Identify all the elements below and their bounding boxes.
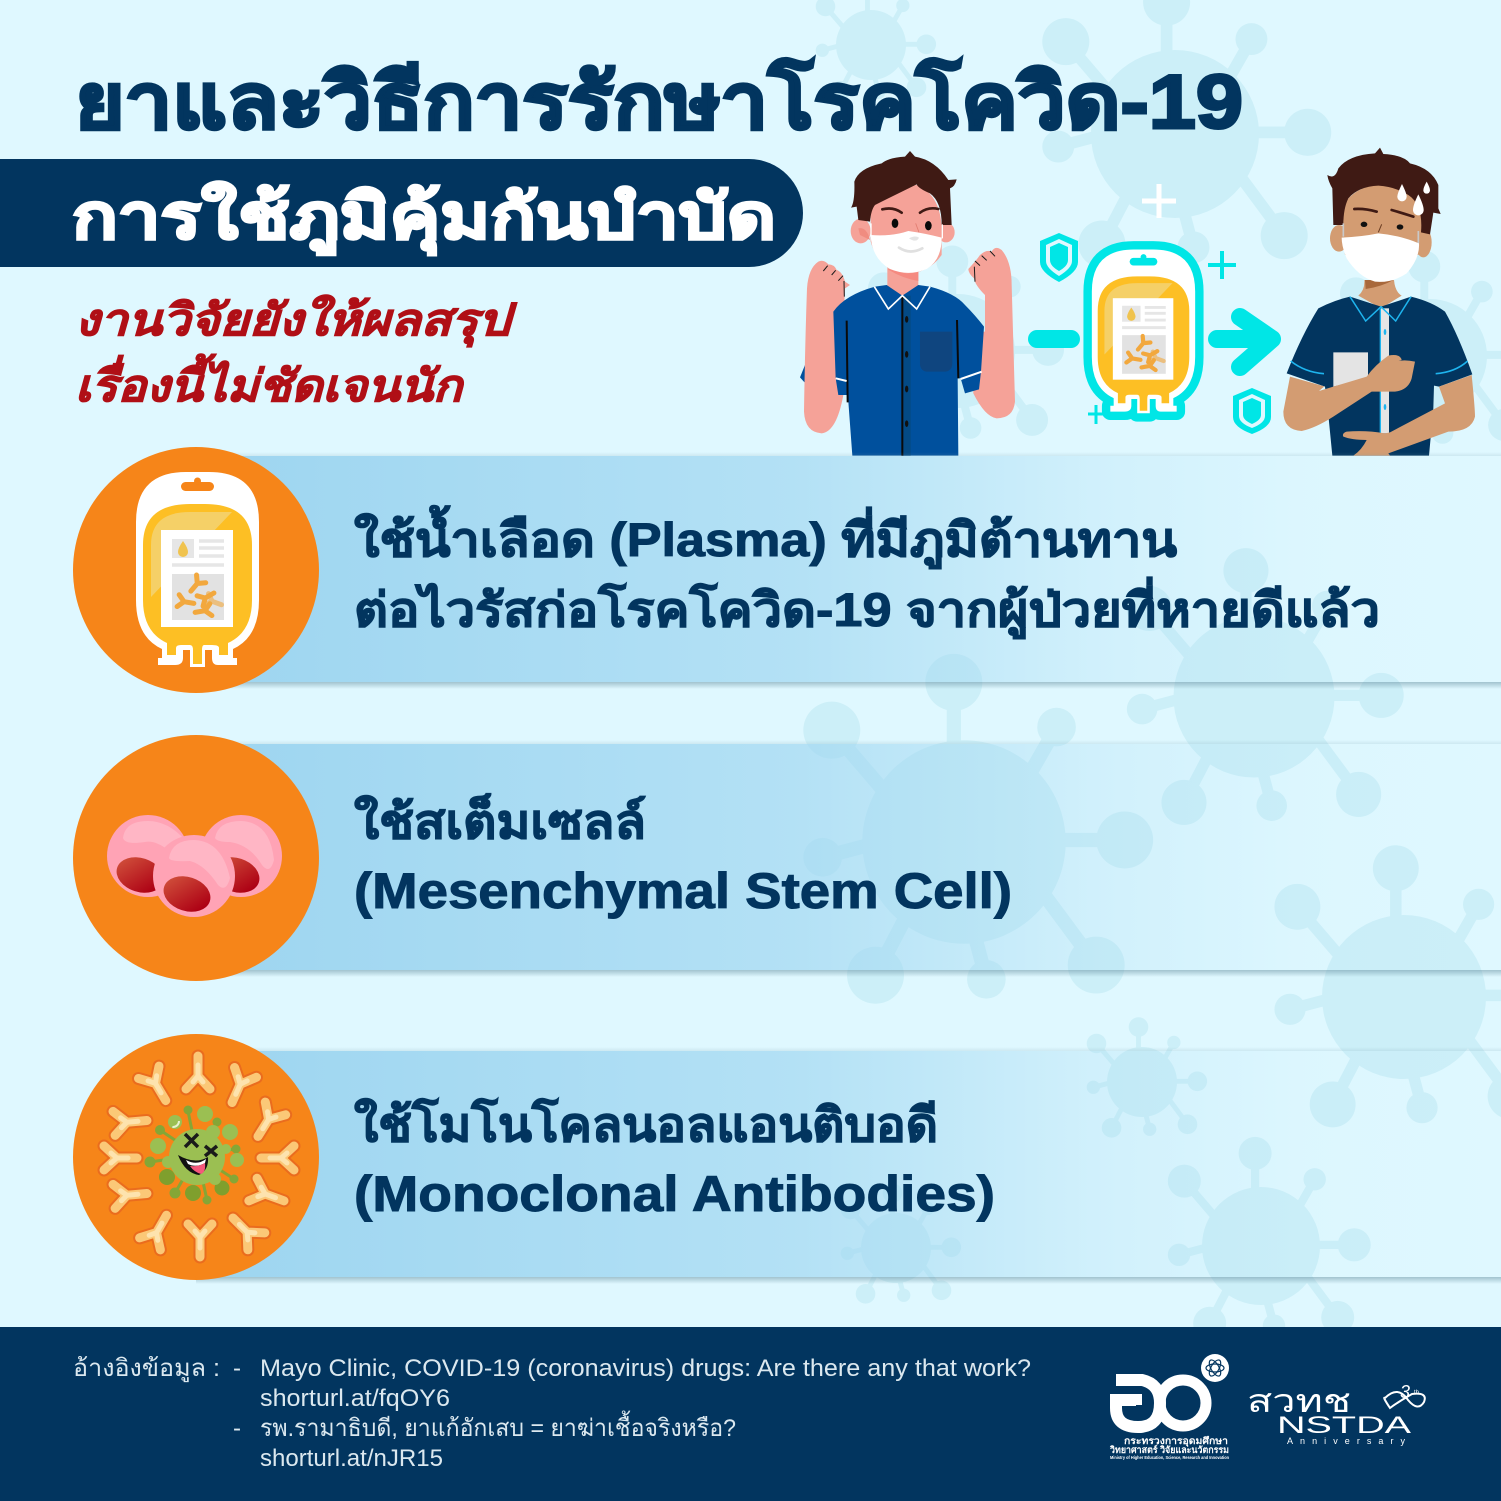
logo: NSTDA: สวทช [1247, 1383, 1351, 1419]
subtitle text: การใช้ภูมิคุ้มกันบำบัด [72, 181, 776, 255]
band [196, 744, 1501, 970]
logo: ministry: วิทยาศาสตร์ วิจัยและนวัตกรรม [1109, 1444, 1229, 1456]
logo: ministry: กระทรวงการอุดมศึกษา [1124, 1435, 1228, 1447]
panel: stem cell [73, 735, 1501, 981]
mask [1343, 223, 1418, 243]
band [196, 1051, 1501, 1277]
title: ยาและวิธีการรักษาโรคโควิด-19 [75, 57, 1243, 145]
icon: dead virus [146, 1106, 244, 1203]
references [73, 1355, 1031, 1472]
neck [1358, 280, 1402, 308]
band [196, 456, 1501, 682]
text: (Monoclonal Antibodies) [354, 1166, 995, 1222]
shirt [1287, 297, 1472, 456]
ears [1330, 225, 1348, 252]
logo: NSTDA: Anniversary [1287, 1436, 1406, 1446]
ears [851, 219, 871, 243]
logo: NSTDA: 3 [1400, 1382, 1410, 1402]
red note [75, 294, 518, 411]
sleeve tip [800, 365, 806, 384]
icon: plasma bag [136, 472, 259, 667]
text [354, 505, 1380, 640]
icon: plus signs [1088, 184, 1236, 424]
pocket [1333, 352, 1368, 387]
panel: plasma [73, 447, 1501, 693]
arms [1283, 355, 1415, 431]
logo: ministry: Ministry of Higher Education, Science, Research and Innovation [1110, 1455, 1229, 1460]
red note: เรื่องนี้ไม่ชัดเจนนัก [75, 353, 465, 411]
icon circle [73, 1034, 319, 1280]
icon: shield right [1233, 388, 1271, 434]
sweat drops [1397, 184, 1407, 201]
references: Mayo Clinic, COVID-19 (coronavirus) drugs: Are there any that work? [260, 1355, 1031, 1382]
hair [851, 151, 957, 225]
text [354, 1097, 995, 1222]
text [354, 792, 1012, 919]
text: ใช้น้ำเลือด (Plasma) ที่มีภูมิต้านทาน [354, 505, 1177, 570]
references: - [233, 1355, 241, 1382]
icon circle [73, 735, 319, 981]
left arm [804, 261, 850, 433]
mask [871, 223, 942, 238]
illustration: plasma bag cyan [1092, 249, 1195, 413]
red note: งานวิจัยยังให้ผลสรุป [75, 294, 518, 348]
logo: NSTDA: th [1414, 1390, 1419, 1396]
decorative virus background [803, 0, 1501, 1340]
text: ต่อไวรัสก่อโรคโควิด-19 จากผู้ป่วยที่หายดีแล้ว [354, 576, 1380, 640]
face [1343, 185, 1422, 255]
icon: antibodies ring [104, 1056, 294, 1257]
icon circle [73, 447, 319, 693]
hair [1327, 148, 1441, 234]
arrow [1217, 317, 1272, 367]
references: อ้างอิงข้อมูล : [73, 1355, 220, 1383]
right arm [968, 248, 1015, 418]
text: ใช้โมโนโคลนอลแอนติบอดี [354, 1097, 938, 1151]
text: (Mesenchymal Stem Cell) [354, 863, 1012, 919]
references: shorturl.at/nJR15 [260, 1445, 443, 1472]
icon: shield left [1040, 233, 1078, 282]
illustration: sick man [1283, 148, 1475, 456]
subtitle pill [0, 159, 803, 267]
face [871, 185, 942, 273]
footer [0, 1327, 1501, 1501]
references: - [233, 1415, 241, 1442]
references: shorturl.at/fqOY6 [260, 1385, 450, 1412]
logo: NSTDA: NSTDA [1277, 1412, 1411, 1439]
text: ใช้สเต็มเซลล์ [354, 792, 646, 848]
icon: stem cells [107, 815, 282, 918]
shirt [833, 285, 984, 456]
panel: monoclonal antibodies [73, 1034, 1501, 1284]
references: รพ.รามาธิบดี, ยาแก้อักเสบ = ยาฆ่าเชื้อจริงหรือ? [260, 1410, 736, 1442]
logo: ministry [1109, 1354, 1229, 1460]
logo: NSTDA [1247, 1382, 1425, 1446]
arrow: dash [1028, 330, 1080, 348]
illustration: healthy man donating [800, 151, 1015, 456]
neck [887, 265, 918, 296]
